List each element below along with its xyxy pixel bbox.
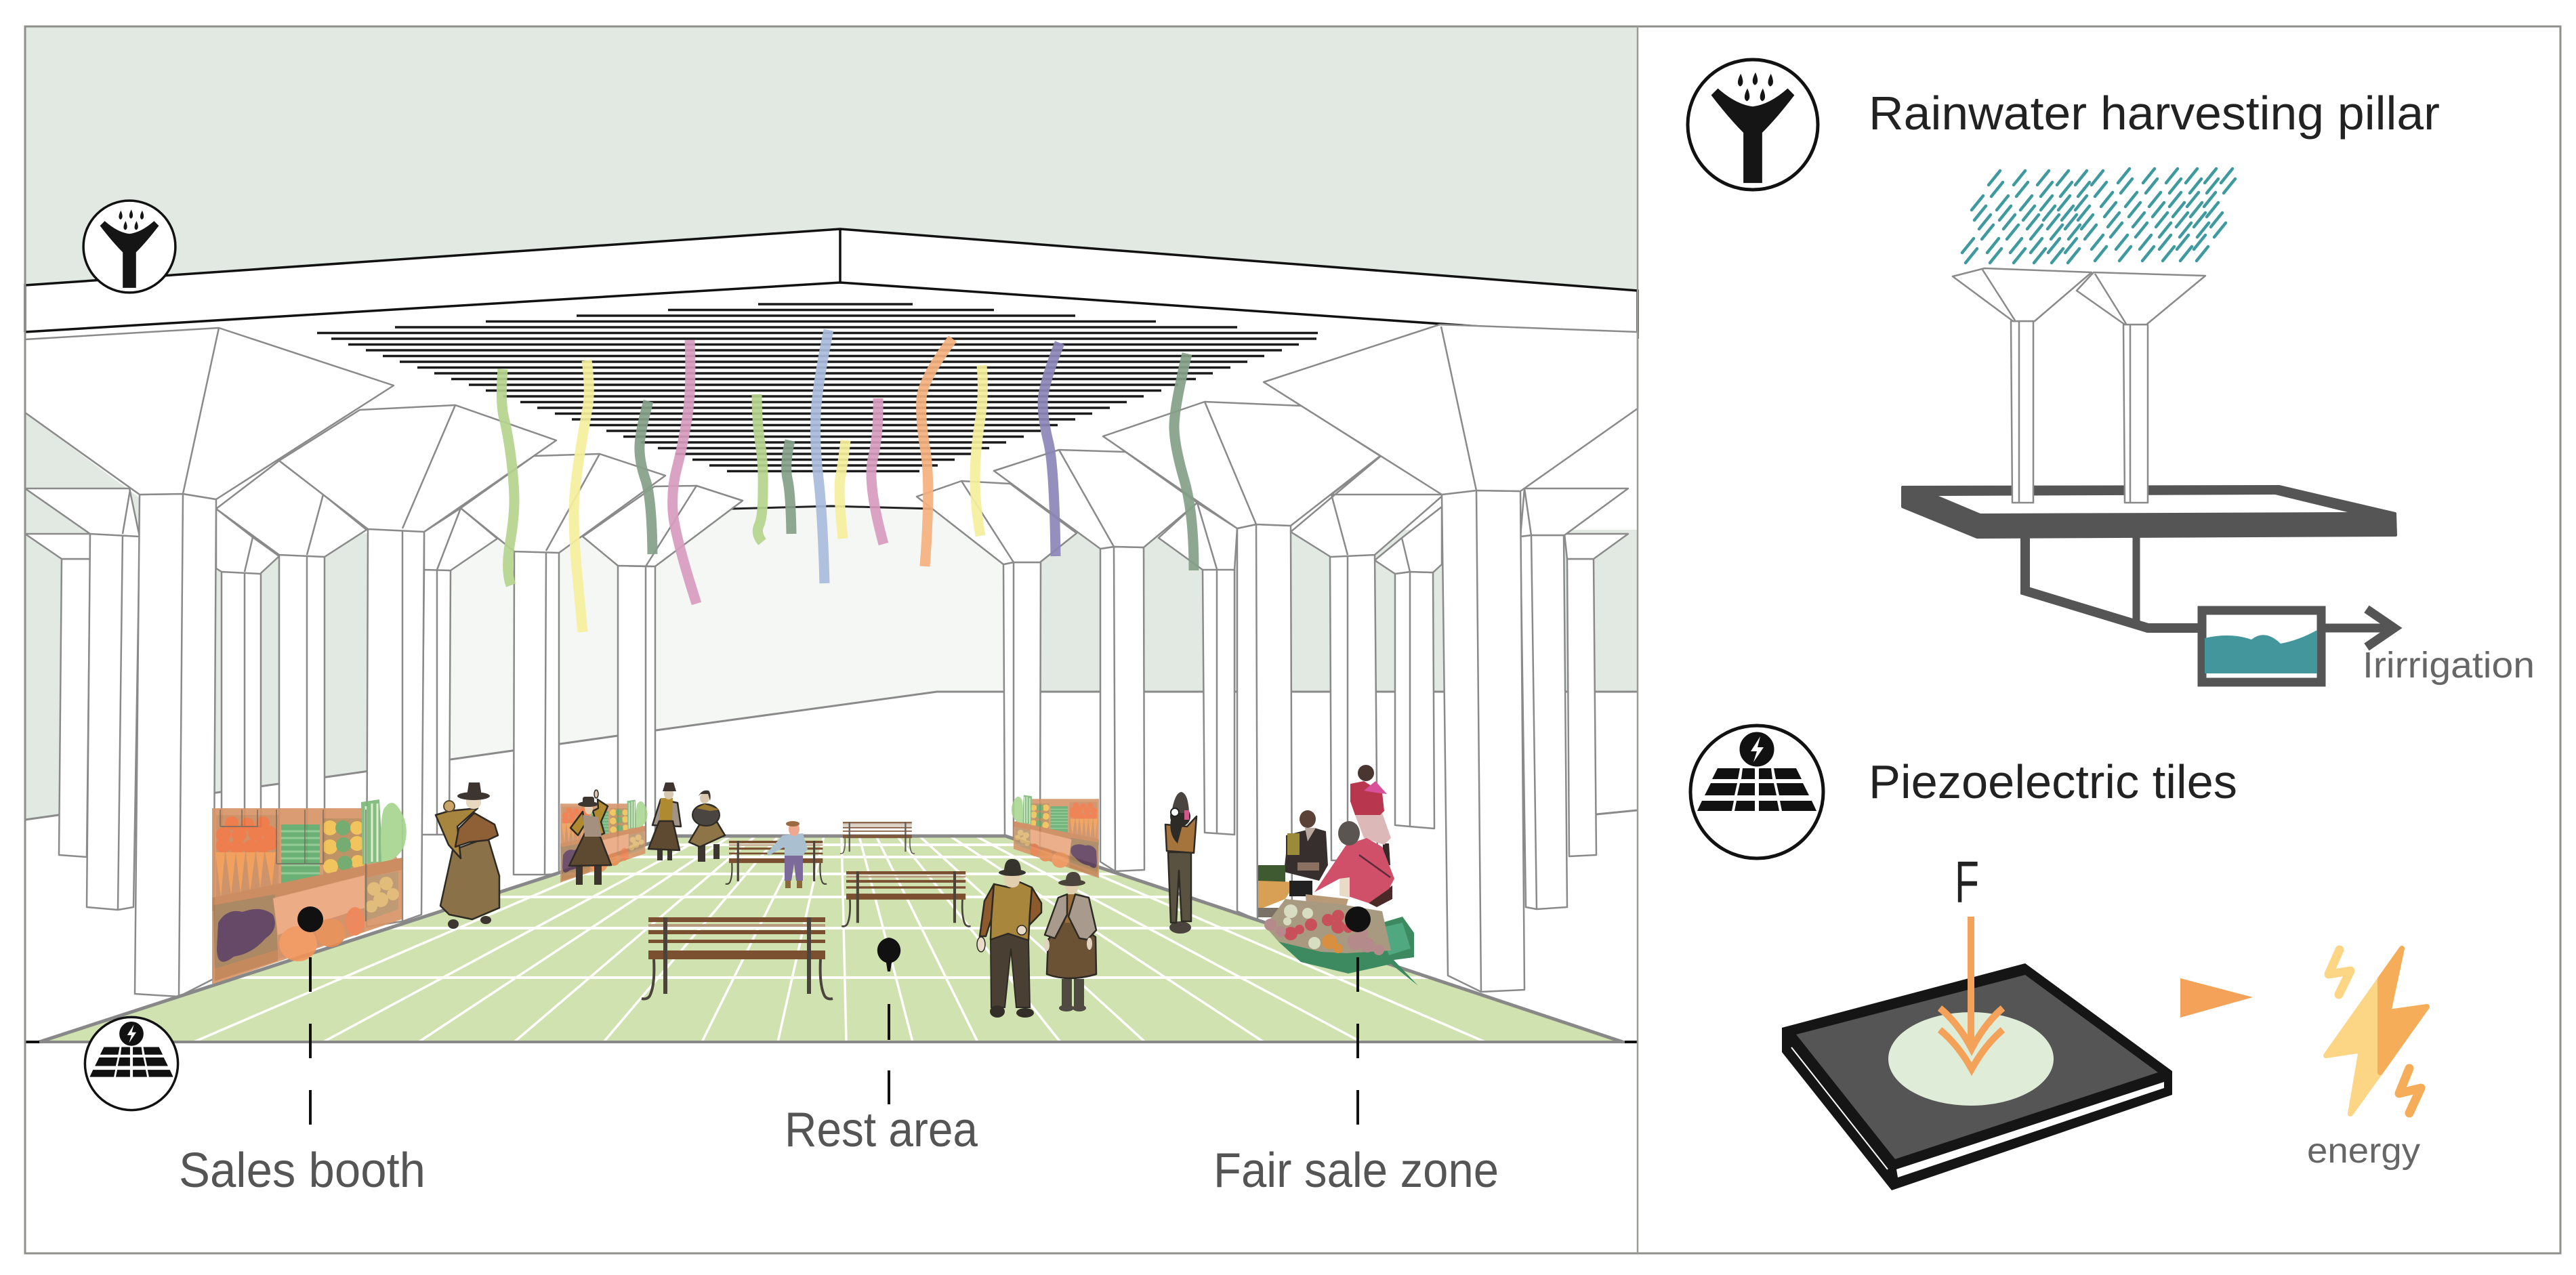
- person: seated man on bench: [767, 821, 808, 888]
- icon: piezoelectric tiles: [1690, 726, 1823, 858]
- market stalls with produce: [212, 795, 1099, 984]
- label: force: F: [1955, 850, 1979, 915]
- pipes to tank and arrow: [2025, 535, 2394, 647]
- marker: sales booth: [297, 906, 323, 1125]
- right pillars: [917, 325, 1638, 992]
- left side wall openings: [25, 413, 449, 820]
- back wall: [449, 507, 1005, 760]
- label: irrigation: Irirrigation: [2363, 645, 2535, 686]
- bench: far: [840, 822, 915, 854]
- heading: piezoelectric tiles: Piezoelectric tiles: [1869, 755, 2237, 808]
- label: fair sale zone: Fair sale zone: [1213, 1144, 1499, 1198]
- person: photographer: [1165, 792, 1197, 934]
- person: woman with bundle: [689, 791, 725, 862]
- icon: piezoelectric tile marker: [85, 1017, 178, 1110]
- arrow: orange triangle: [2180, 978, 2253, 1018]
- panel: legend diagrams: [1688, 60, 2535, 1190]
- fair produce: flowers on green cloth: [1264, 899, 1418, 986]
- ceiling slats: [317, 304, 1318, 472]
- person: woman in brown skirt: [648, 782, 681, 860]
- marker: fair sale zone: [1345, 906, 1371, 1125]
- people in the market: [436, 765, 1418, 1018]
- label: rest area: Rest area: [785, 1103, 978, 1157]
- stall: far left: [560, 799, 648, 883]
- sky / exterior background: [25, 26, 1638, 352]
- person: seated vendor in black: [1284, 810, 1328, 881]
- canopy beam and interior ground: [25, 229, 1638, 1042]
- person: man in vest: [977, 859, 1041, 1018]
- stall: far right: [1012, 795, 1099, 878]
- person: crouching vendor in pink: [1306, 821, 1394, 910]
- beam outline: [25, 229, 1638, 337]
- tile diagram: [1782, 963, 2172, 1190]
- arrow: applied force: [1940, 917, 2003, 1069]
- water tank: [2202, 610, 2321, 682]
- person: woman carrying child: [436, 782, 499, 929]
- green tiled floor: [0, 836, 1694, 1042]
- marker: rest area: [877, 938, 900, 1104]
- label: energy: energy: [2307, 1131, 2420, 1171]
- person: woman in grey shawl: [1044, 872, 1096, 1011]
- stall: near left: [212, 799, 407, 984]
- person: vendor in red standing: [1350, 765, 1391, 865]
- left pillars: [25, 328, 743, 997]
- bench: middle left: [726, 841, 827, 884]
- park benches: [642, 822, 971, 999]
- perspective scene: [0, 201, 1694, 1198]
- fair produce: bags, cloth: [1258, 865, 1312, 917]
- rain streaks: [1962, 169, 2235, 263]
- bench: near: [642, 917, 833, 999]
- person: waving woman: [569, 790, 611, 885]
- label: sales booth: Sales booth: [179, 1144, 425, 1198]
- bench: middle right: [842, 871, 971, 926]
- heading: rainwater harvesting pillar: Rainwater harvesting pillar: [1869, 87, 2440, 140]
- hanging coloured ribbons: [501, 330, 1194, 632]
- gutter frame: [1903, 486, 2396, 537]
- icon: rainwater pillar marker: [83, 201, 175, 293]
- icon: rainwater pillar: [1688, 60, 1818, 190]
- right side wall openings: [1041, 530, 1638, 692]
- collector pillars: [1953, 268, 2205, 503]
- icon: energy bolts: [2326, 948, 2427, 1114]
